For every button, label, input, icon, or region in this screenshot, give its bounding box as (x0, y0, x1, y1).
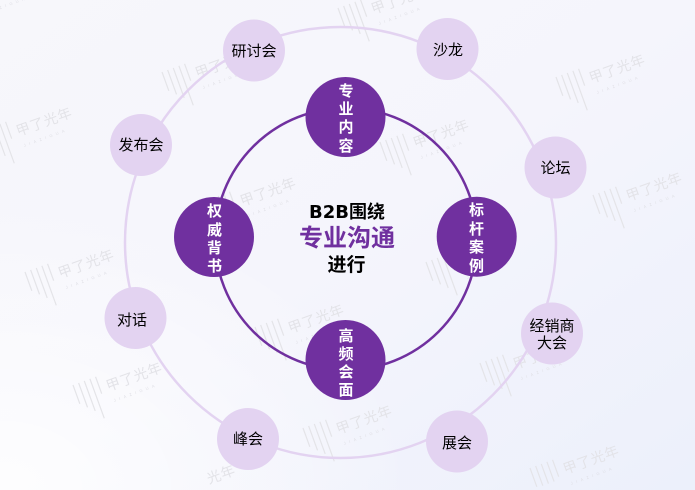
node: 论坛 (524, 136, 586, 198)
watermarks: JIAZIGUA (420, 139, 466, 160)
watermarks: JIAZIGUA (520, 360, 566, 381)
watermarks: 甲了光年 (104, 359, 164, 394)
watermarks: JIAZIGUA (596, 74, 642, 95)
watermarks: JIAZIGUA (23, 127, 69, 148)
watermarks: 甲了光年 (334, 402, 394, 437)
center title (299, 202, 395, 276)
watermarks: 甲了光年 (56, 246, 116, 281)
center title: 进行 (327, 254, 366, 276)
node: 对话 (104, 287, 166, 349)
watermarks: JIAZIGUA (343, 425, 389, 446)
inner ring (215, 108, 477, 370)
pillar: 标杆案例: 标 (469, 202, 484, 219)
watermarks: JIAZIGUA (202, 69, 248, 90)
pillar: 专业内容 (306, 77, 386, 157)
pillar: 标杆案例 (437, 197, 517, 277)
node: 峰会 (217, 408, 279, 470)
node: 研讨会: 研讨会 (231, 43, 277, 60)
node: 经销商大会 (521, 302, 583, 364)
pillar: 标杆案例: 例 (469, 258, 484, 275)
pillar: 专业内容: 业 (338, 101, 354, 118)
pillar: 高频会面 (306, 320, 386, 400)
watermarks: JIAZIGUA (113, 382, 159, 403)
outer ring (125, 27, 556, 458)
node: 沙龙: 沙龙 (433, 42, 463, 59)
watermarks: 甲了光年 (624, 169, 684, 204)
watermarks: JIAZIGUA (247, 197, 293, 218)
node: 展会 (426, 410, 488, 472)
watermarks: 甲了光年 (457, 236, 517, 271)
pillar: 高频会面: 会 (338, 363, 354, 381)
pillar: 专业内容: 内 (338, 119, 354, 136)
center title: B2B围绕 (309, 202, 385, 223)
watermarks: 甲了光年 (411, 116, 471, 151)
pillar: 权威背书: 背 (207, 239, 222, 257)
node: 论坛: 论坛 (540, 160, 571, 177)
watermarks: 甲了光年 (286, 301, 346, 336)
watermarks: 光年 (205, 462, 237, 487)
node: 发布会: 发布会 (118, 137, 164, 154)
pillar: 权威背书: 威 (207, 221, 222, 239)
node: 沙龙 (416, 18, 478, 80)
watermarks: JIAZIGUA (633, 192, 679, 213)
pillar: 权威背书: 权 (207, 202, 222, 220)
node: 发布会 (110, 114, 172, 176)
center title: 专业沟通 (299, 225, 395, 252)
watermarks: 甲了光年 (14, 104, 74, 139)
watermarks: 甲了光年 (193, 46, 253, 81)
watermarks: JIAZIGUA (65, 269, 111, 290)
watermarks: JIAZIGUA (295, 324, 341, 345)
pillar: 专业内容: 专 (338, 82, 354, 100)
pillar: 权威背书 (174, 197, 254, 277)
node: 展会: 展会 (442, 435, 472, 452)
watermarks: 甲了光年 (587, 51, 647, 86)
node: 峰会: 峰会 (233, 431, 263, 448)
watermarks: JIAZIGUA (378, 5, 424, 26)
pillar: 标杆案例: 案 (469, 238, 484, 256)
watermarks: JIAZIGUA (570, 465, 616, 486)
node: 研讨会 (223, 20, 285, 82)
pillar: 高频会面: 面 (338, 382, 354, 399)
pillar: 高频会面: 高 (338, 327, 354, 345)
watermarks: JIAZIGUA (466, 259, 512, 280)
pillar: 高频会面: 频 (338, 346, 354, 363)
node: 经销商大会: 经销商 (529, 318, 575, 335)
node: 经销商大会: 大会 (537, 335, 567, 352)
watermarks: 甲了光年 (511, 337, 571, 372)
node: 对话: 对话 (117, 312, 147, 329)
watermarks: 甲了光年 (561, 442, 621, 477)
pillar: 专业内容: 容 (338, 137, 354, 155)
pillar: 标杆案例: 杆 (469, 220, 484, 238)
watermarks: 甲了光年 (238, 174, 298, 209)
pillar: 权威背书: 书 (207, 258, 222, 275)
